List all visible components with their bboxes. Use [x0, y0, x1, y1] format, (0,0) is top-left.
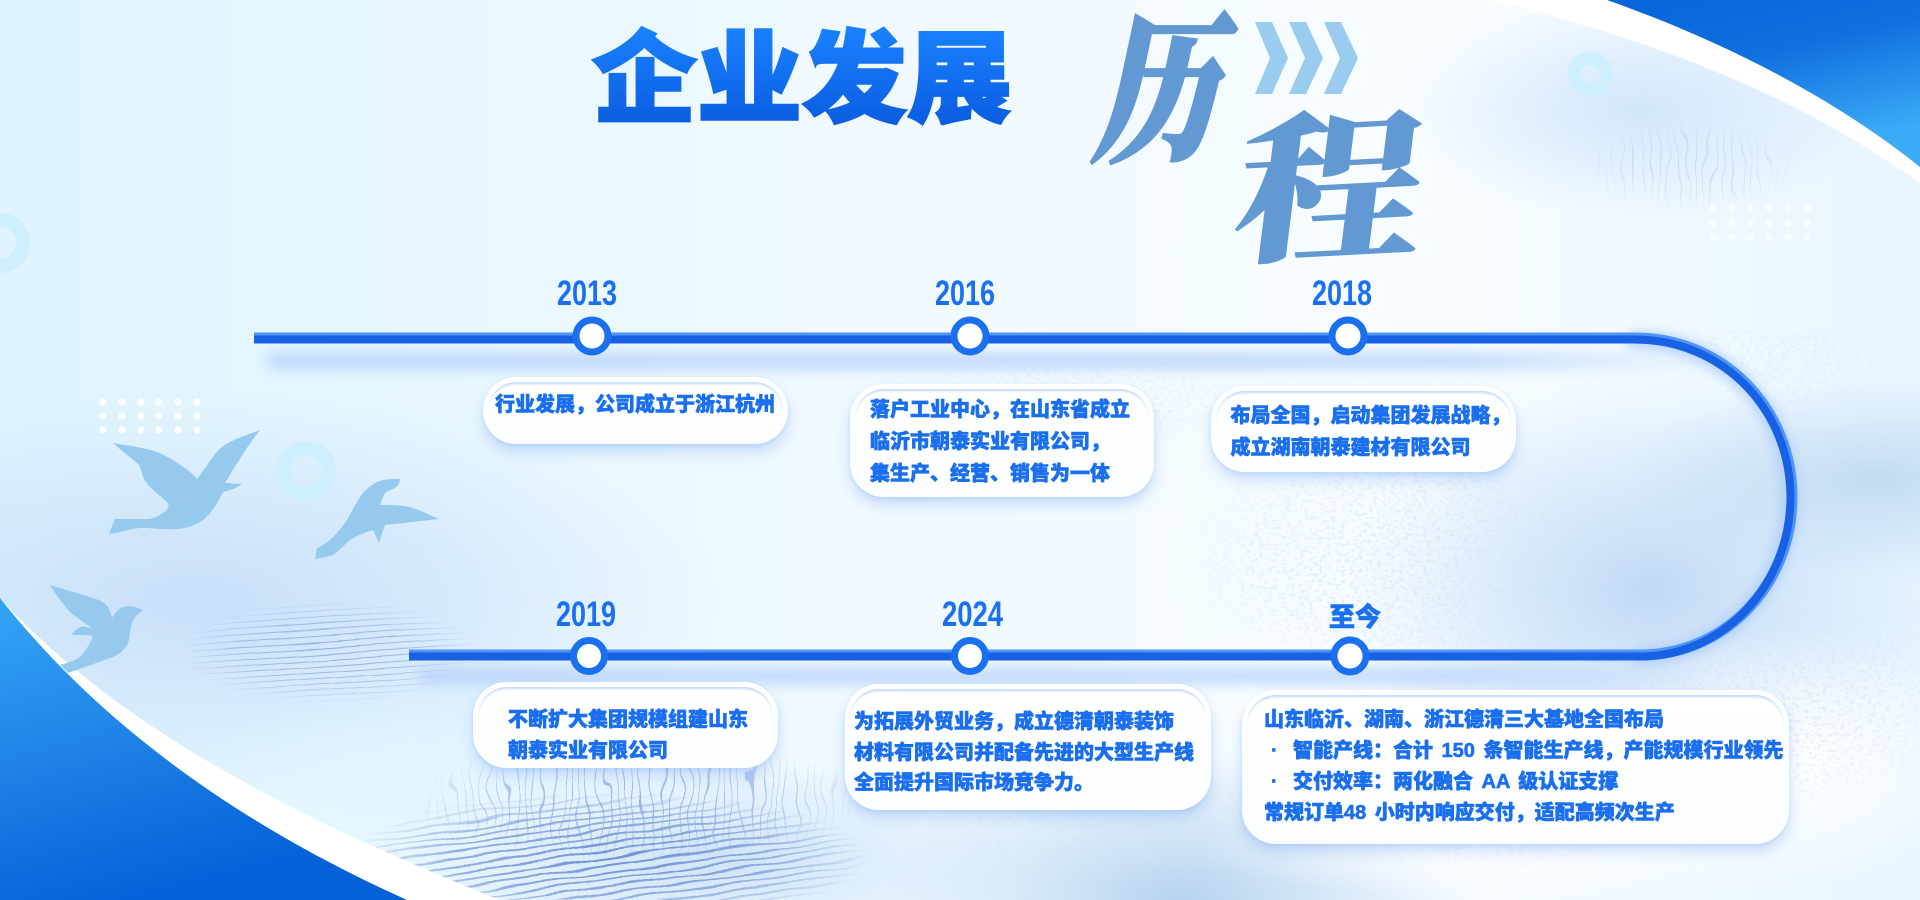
textured fabric pattern — [170, 120, 1920, 900]
card text 2024 — [854, 710, 1194, 794]
corner: top right blue — [1607, 0, 1920, 167]
corner: bottom left blue — [0, 598, 407, 900]
card 2019 — [473, 682, 778, 768]
node 2016 — [954, 320, 986, 352]
year 2018: 2018 — [1312, 274, 1372, 313]
decorative ring left edge — [0, 213, 30, 273]
corner: bottom left white band — [0, 598, 500, 900]
card text present: 常规订单48 小时内响应交付，适配高频次生产 — [1264, 802, 1675, 824]
card 2013 — [483, 377, 788, 444]
card text 2013: 行业发展，公司成立于浙江杭州 — [495, 394, 775, 416]
node 2019 — [574, 640, 604, 672]
card 2016 — [850, 384, 1154, 497]
year 2024: 2024 — [942, 595, 1003, 634]
card text 2018: 成立湖南朝泰建材有限公司 — [1230, 437, 1470, 459]
card text 2019: 不断扩大集团规模组建山东 — [508, 709, 748, 731]
year 2016: 2016 — [935, 274, 995, 313]
card text 2016: 临沂市朝泰实业有限公司， — [870, 431, 1110, 453]
node 2018 — [1332, 320, 1364, 352]
card text present: 交付效率：两化融合 AA 级认证支撑 — [1293, 771, 1618, 793]
card text present: · — [1271, 740, 1278, 762]
decorative ring middle left — [283, 448, 329, 494]
dot grid left — [99, 398, 201, 434]
card text 2019 — [508, 708, 748, 762]
card text 2016 — [870, 398, 1130, 485]
dot grid top right — [1709, 204, 1811, 241]
card text 2019: 朝泰实业有限公司 — [508, 740, 668, 762]
year 2019: 2019 — [556, 595, 616, 634]
card text 2018: 布局全国，启动集团发展战略， — [1230, 405, 1510, 427]
node 2024 — [954, 640, 986, 672]
card text 2024: 全面提升国际市场竞争力。 — [854, 772, 1094, 794]
card text 2018 — [1230, 404, 1510, 459]
timeline path — [254, 338, 1792, 656]
title: chevron arrows — [1255, 22, 1358, 94]
card text present: · — [1271, 771, 1278, 793]
icon: flying bird large — [109, 430, 260, 534]
card 2024 — [845, 684, 1211, 810]
timeline shadows — [275, 340, 1790, 676]
node 2013 — [576, 320, 608, 352]
corner: top right white band — [1490, 0, 1920, 183]
node present — [1334, 640, 1366, 672]
card text present: 智能产线：合计 150 条智能生产线，产能规模行业领先 — [1293, 740, 1783, 762]
card 2018 — [1211, 386, 1516, 472]
title: 企业发展: 企业发展 — [592, 24, 1012, 136]
card text 2024: 材料有限公司并配备先进的大型生产线 — [854, 742, 1194, 764]
card text 2016: 落户工业中心，在山东省成立 — [870, 399, 1130, 421]
card text 2024: 为拓展外贸业务，成立德清朝泰装饰 — [854, 711, 1174, 733]
card present — [1242, 690, 1789, 844]
card text 2016: 集生产、经营、销售为一体 — [870, 463, 1110, 485]
decorative ring top right — [1574, 58, 1606, 90]
icon: flying bird right — [315, 479, 439, 559]
year present 至今: 至今 — [1329, 602, 1381, 632]
year 2013: 2013 — [557, 274, 617, 313]
card text present — [1264, 708, 1783, 824]
icon: flying bird bottom — [50, 585, 143, 673]
card text present: 山东临沂、湖南、浙江德清三大基地全国布局 — [1264, 709, 1664, 731]
title: calligraphy 程: 程 — [1225, 56, 1440, 296]
